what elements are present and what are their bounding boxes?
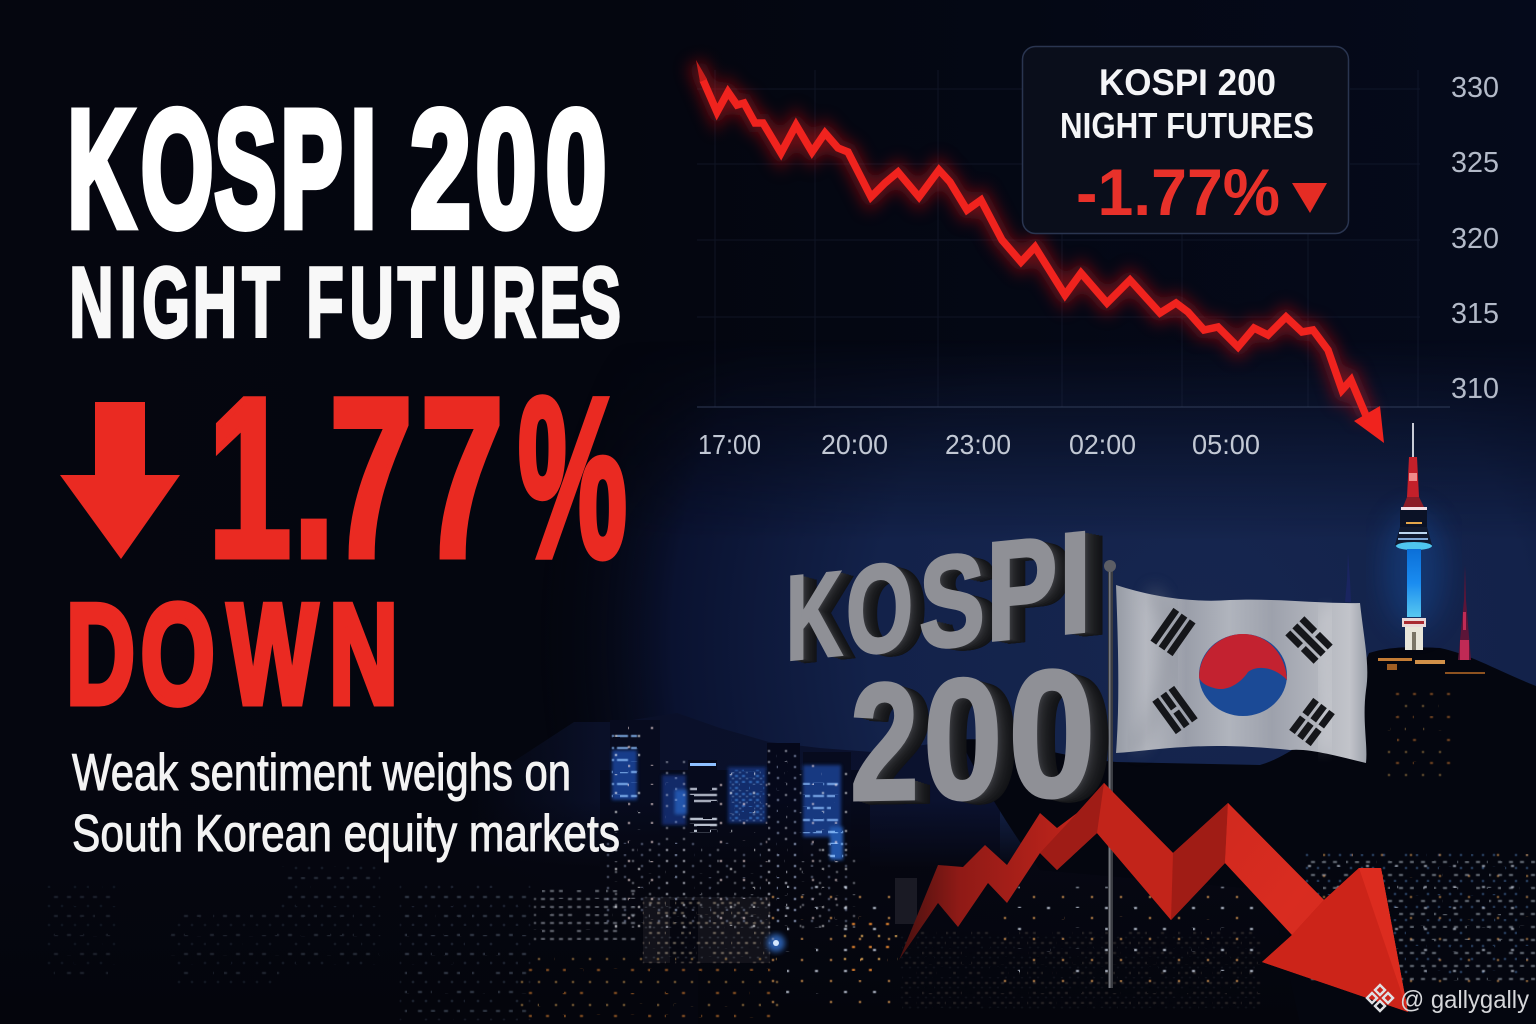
axis: time labels	[698, 429, 1260, 460]
text: subtitle: South Korean equity markets	[72, 805, 620, 863]
3D word: KOSPI: P	[986, 506, 1057, 671]
flag: trigram top right	[1285, 616, 1333, 664]
figure: 1.77%: 1.77	[208, 351, 504, 604]
background: hill with lights under the tower	[966, 647, 1536, 983]
text: subtitle	[72, 744, 620, 863]
flag: trigram top left	[1150, 608, 1196, 656]
axis: time labels: 20:00	[821, 429, 888, 460]
background: night sky	[608, 0, 1536, 861]
3D word: 200: 0	[1008, 633, 1095, 836]
3D word: 200: 2	[850, 649, 919, 836]
flag: trigram bottom right	[1289, 698, 1335, 746]
3D word: 200	[850, 633, 1108, 836]
axis: time labels: 17:00	[698, 429, 761, 460]
3D word: KOSPI: I	[1058, 500, 1092, 665]
flag: taegeuk circle	[1199, 634, 1287, 716]
city: blue glowing facades	[612, 750, 843, 860]
icon: watermark diamond logo	[1367, 985, 1393, 1011]
icon: South Korean flag	[1116, 585, 1367, 763]
3D word: KOSPI: O	[846, 537, 913, 682]
callout: chart summary panel: NIGHT FUTURES	[1060, 105, 1314, 146]
background: city skyline	[48, 720, 1300, 1024]
figure: 1.77%: %	[518, 351, 627, 605]
label: DOWN: DOWN	[66, 575, 398, 734]
flag: trigram bottom left	[1152, 686, 1198, 734]
3D word: KOSPI	[98, 500, 1392, 1006]
chart: red night futures price line	[696, 60, 1384, 443]
3D word: 200: 0	[922, 643, 1002, 836]
panel: chart gridlines and axes	[697, 70, 1420, 407]
3D word: KOSPI: K	[786, 547, 842, 686]
text: watermark handle: @ gallygally	[1400, 986, 1529, 1014]
axis: time labels: 23:00	[945, 429, 1011, 460]
axis: y labels: 315	[1451, 298, 1499, 330]
text: subtitle: Weak sentiment weighs on	[72, 744, 571, 802]
chart: baseline axis	[697, 406, 1450, 408]
headline: KOSPI 200: 200	[410, 76, 607, 261]
callout: chart summary panel: -1.77%	[1076, 155, 1280, 229]
headline: KOSPI 200	[67, 75, 607, 262]
axis: time labels: 05:00	[1192, 429, 1260, 460]
background: distant mountain	[470, 713, 1000, 900]
callout: chart summary panel	[1022, 46, 1348, 234]
3D title: KOSPI 200	[98, 500, 1392, 1006]
arrow: 3D red falling zigzag	[899, 783, 1408, 1012]
3D word: KOSPI: S	[919, 525, 985, 677]
callout: chart summary panel: KOSPI 200	[1099, 62, 1276, 103]
axis: y labels	[1451, 72, 1499, 405]
icon: big red down arrow	[60, 402, 180, 559]
city: lit windows	[45, 724, 1260, 1020]
axis: y labels: 330	[1451, 72, 1499, 104]
icon: Seoul N Tower	[1345, 423, 1471, 660]
headline: NIGHT FUTURES: NIGHT FUTURES	[69, 248, 621, 358]
headline: KOSPI 200: KOSPI	[67, 75, 376, 262]
axis: y labels: 320	[1451, 223, 1499, 255]
axis: y labels: 310	[1451, 373, 1499, 405]
axis: y labels: 325	[1451, 147, 1499, 179]
icon: flag pole	[1104, 560, 1116, 988]
axis: time labels: 02:00	[1069, 429, 1136, 460]
